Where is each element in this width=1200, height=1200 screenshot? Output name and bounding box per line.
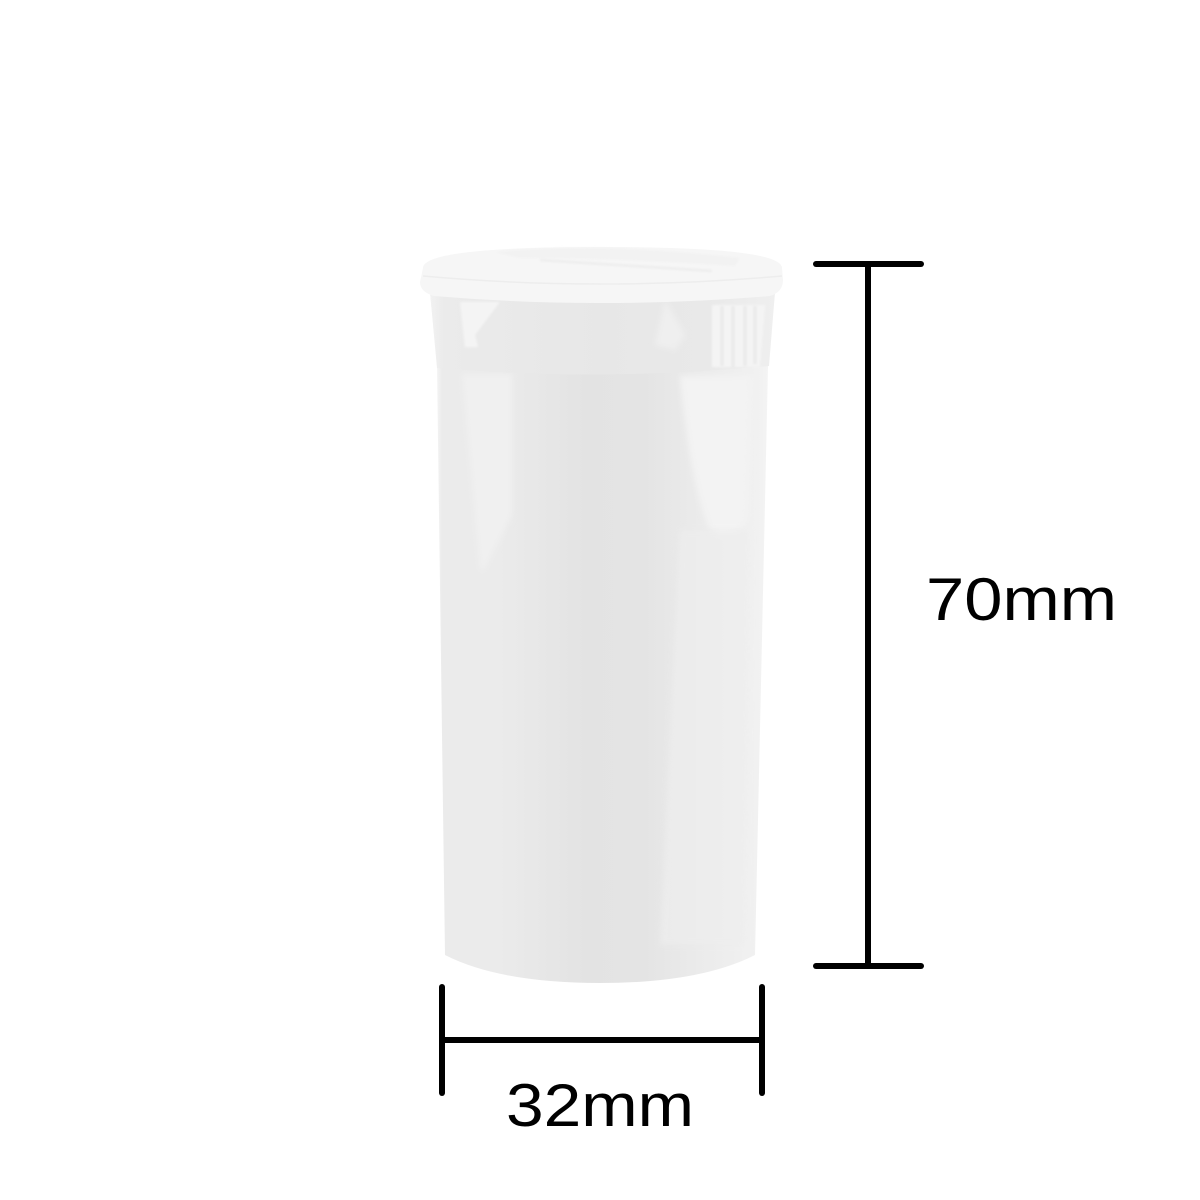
container: white pop-top vial (420, 247, 783, 983)
dimension: width bracket (442, 987, 762, 1093)
label: height 70mm: 70mm (926, 566, 1117, 633)
dimension: height bracket (816, 264, 921, 966)
vial lid (420, 247, 783, 303)
vial neck (430, 292, 775, 375)
label: width 32mm: 32mm (506, 1072, 694, 1139)
vial body (430, 292, 775, 983)
